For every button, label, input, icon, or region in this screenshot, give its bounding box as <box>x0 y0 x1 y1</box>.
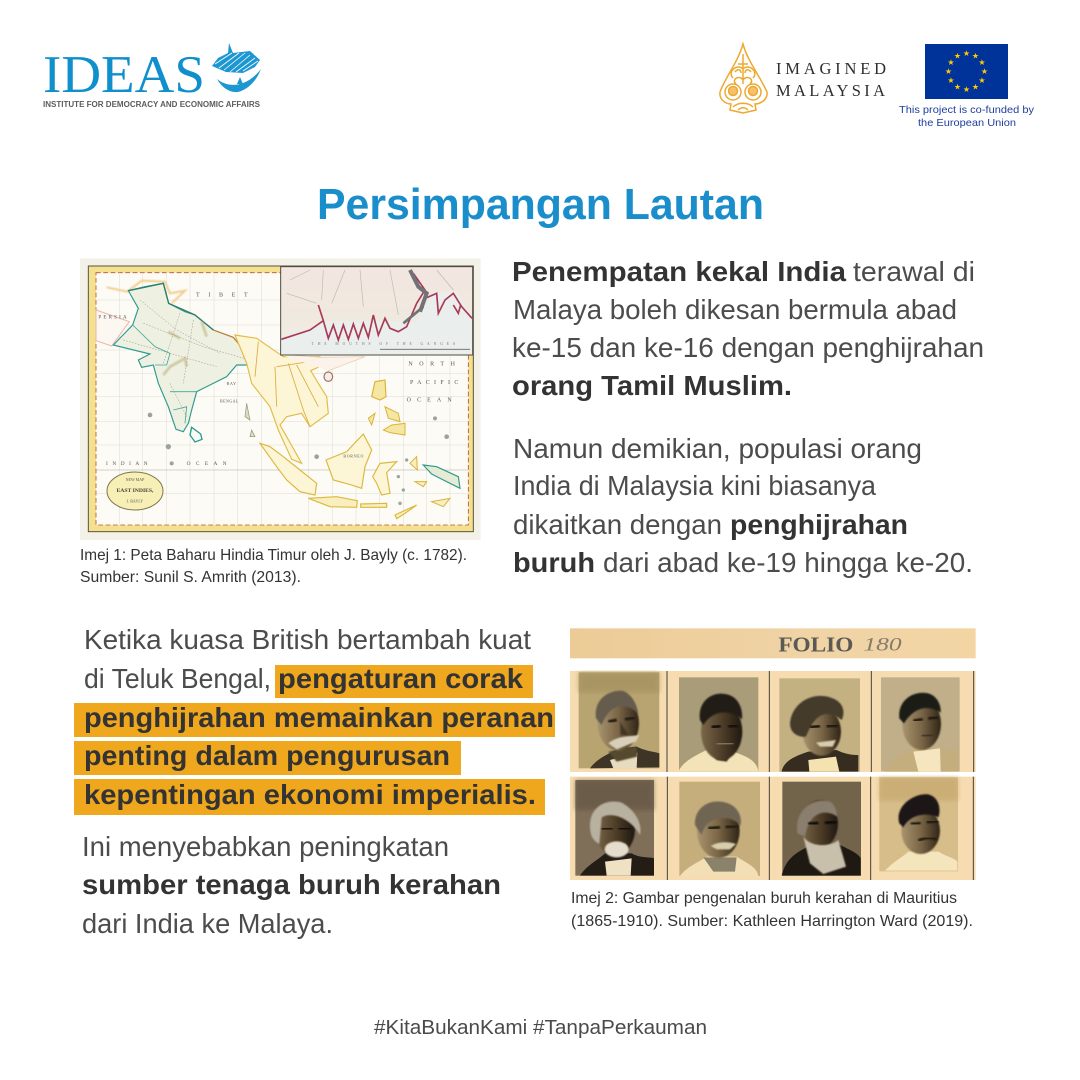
land: Hainan <box>324 372 333 381</box>
map inset: Bengal delta <box>281 267 473 355</box>
text block: settlement history: Penempatan kekal India <box>512 256 846 287</box>
land: Sri Lanka <box>190 427 202 442</box>
text block: labour migration: penghijrahan <box>730 509 908 540</box>
portrait 2 <box>678 677 758 772</box>
text block: labour migration: dari abad ke-19 hingga ke-20. <box>603 547 973 578</box>
logo: European Union flag: ★ <box>978 58 986 67</box>
map image: New Map of the East Indies <box>80 258 481 540</box>
photo: folio strip: 180 <box>863 635 902 656</box>
text block: settlement history: terawal di <box>853 256 975 287</box>
text block: indentured labour: sumber tenaga buruh kerahan <box>82 869 501 900</box>
text block: labour migration: buruh <box>513 547 595 578</box>
logo: European Union flag: ★ <box>963 85 970 94</box>
text block: settlement history <box>512 256 984 401</box>
portrait 6 <box>679 782 760 876</box>
map cartouche: NEW MAP <box>126 477 145 482</box>
land: mainland Southeast Asia <box>235 335 328 463</box>
map labels: BENGAL <box>220 398 239 403</box>
map caption <box>80 547 467 586</box>
map cartouche: J. BAYLY <box>127 499 143 504</box>
callout: British migration management highlight: pengaturan corak <box>278 663 523 694</box>
land: Philippines <box>372 380 386 400</box>
logo: IDEAS <box>43 43 261 109</box>
map inset: Bengal delta: THE MOUTHS OF THE GANGES <box>312 342 455 346</box>
portrait 5 <box>575 780 654 876</box>
map labels: PACIFIC <box>410 380 458 386</box>
map grid <box>96 273 468 525</box>
text block: labour migration: dikaitkan dengan <box>513 509 722 540</box>
photo caption: (1865-1910). Sumber: Kathleen Harrington Ward (2019). <box>571 913 973 930</box>
text block: settlement history: orang Tamil Muslim. <box>512 370 792 401</box>
icon: IDEAS bird <box>212 43 261 92</box>
map cartouche <box>107 472 163 510</box>
portrait 1 <box>579 672 659 768</box>
logo: Imagined Malaysia: MALAYSIA <box>776 81 885 100</box>
co-funding note: This project is co-funded by <box>899 104 1035 116</box>
photo caption: Imej 2: Gambar pengenalan buruh kerahan di Mauritius <box>571 890 957 907</box>
hashtags: #KitaBukanKami #TanpaPerkauman <box>374 1016 707 1039</box>
text block: indentured labour: dari India ke Malaya. <box>82 908 333 939</box>
photo: indentured labourer portraits <box>570 671 976 880</box>
logo: European Union flag <box>899 44 1035 129</box>
photo: folio strip <box>570 628 976 658</box>
land: Celebes <box>373 462 397 495</box>
land: India <box>113 283 254 432</box>
portrait 7 <box>782 782 861 876</box>
logo: Imagined Malaysia: IMAGINED <box>776 59 886 78</box>
map labels: TIBET <box>196 293 248 299</box>
portrait 8 <box>879 777 958 871</box>
text block: labour migration <box>513 433 973 578</box>
text block: settlement history: ke-15 dan ke-16 dengan penghijrahan <box>512 332 984 363</box>
callout: British migration management highlight: penghijrahan memainkan peranan <box>84 702 554 733</box>
callout: British migration management highlight <box>74 624 555 815</box>
portrait 4 <box>881 677 960 772</box>
map cartouche: EAST INDIES, <box>116 488 154 494</box>
map caption: Sumber: Sunil S. Amrith (2013). <box>80 569 301 586</box>
map labels <box>98 293 458 467</box>
logo: European Union flag: ★ <box>947 58 955 67</box>
logo: IDEAS: INSTITUTE FOR DEMOCRACY AND ECONOMIC AFFAIRS <box>43 100 261 109</box>
title: Persimpangan Lautan <box>317 180 764 229</box>
callout: British migration management highlight: Ketika kuasa British bertambah kuat <box>84 624 531 655</box>
logo: European Union flag: ★ <box>972 82 979 92</box>
logo: European Union flag: ★ <box>945 67 952 76</box>
text block: labour migration: Namun demikian, populasi orang <box>513 433 922 464</box>
map labels: BORNEO <box>343 453 363 458</box>
land: Borneo <box>326 434 372 488</box>
callout: British migration management highlight: penting dalam pengurusan <box>84 740 450 771</box>
map labels: PERSIA <box>98 315 127 320</box>
co-funding note: the European Union <box>918 117 1016 129</box>
logo: European Union flag: ★ <box>981 67 988 76</box>
map caption: Imej 1: Peta Baharu Hindia Timur oleh J. Bayly (c. 1782). <box>80 547 467 564</box>
land: Persia and Tibet edges <box>96 310 129 346</box>
map labels: NORTH <box>408 362 456 368</box>
logo: European Union flag: ★ <box>954 82 961 92</box>
logo: European Union flag: ★ <box>947 76 955 85</box>
logo: Imagined Malaysia <box>720 44 886 113</box>
map labels: BAY <box>227 381 236 386</box>
text block: indentured labour <box>82 831 501 939</box>
photo caption <box>571 890 973 930</box>
text block: indentured labour: Ini menyebabkan peningkatan <box>82 831 449 862</box>
text block: settlement history: Malaya boleh dikesan bermula abad <box>513 294 957 325</box>
logo: European Union flag: ★ <box>978 76 986 85</box>
logo: European Union flag: ★ <box>963 49 970 58</box>
icon: gold wayang leaf <box>720 44 767 113</box>
logo: IDEAS: IDEAS <box>43 46 205 104</box>
co-funding note <box>899 104 1035 129</box>
logo: European Union flag: ★ <box>972 52 979 60</box>
text block: labour migration: India di Malaysia kini biasanya <box>513 470 876 501</box>
callout: British migration management highlight: kepentingan ekonomi imperialis. <box>84 779 536 810</box>
logo: European Union flag: ★ <box>954 52 961 60</box>
portrait 3 <box>779 678 860 772</box>
map labels: INDIAN <box>106 461 148 467</box>
land: Java and lesser islands <box>308 497 417 519</box>
photo: folio strip: FOLIO <box>778 633 853 657</box>
land: Moluccas and New Guinea <box>423 465 460 488</box>
callout: British migration management highlight: di Teluk Bengal, <box>84 663 271 694</box>
map labels: OCEAN <box>187 461 227 467</box>
land: Sumatra <box>260 443 317 495</box>
map labels: OCEAN <box>407 398 452 404</box>
